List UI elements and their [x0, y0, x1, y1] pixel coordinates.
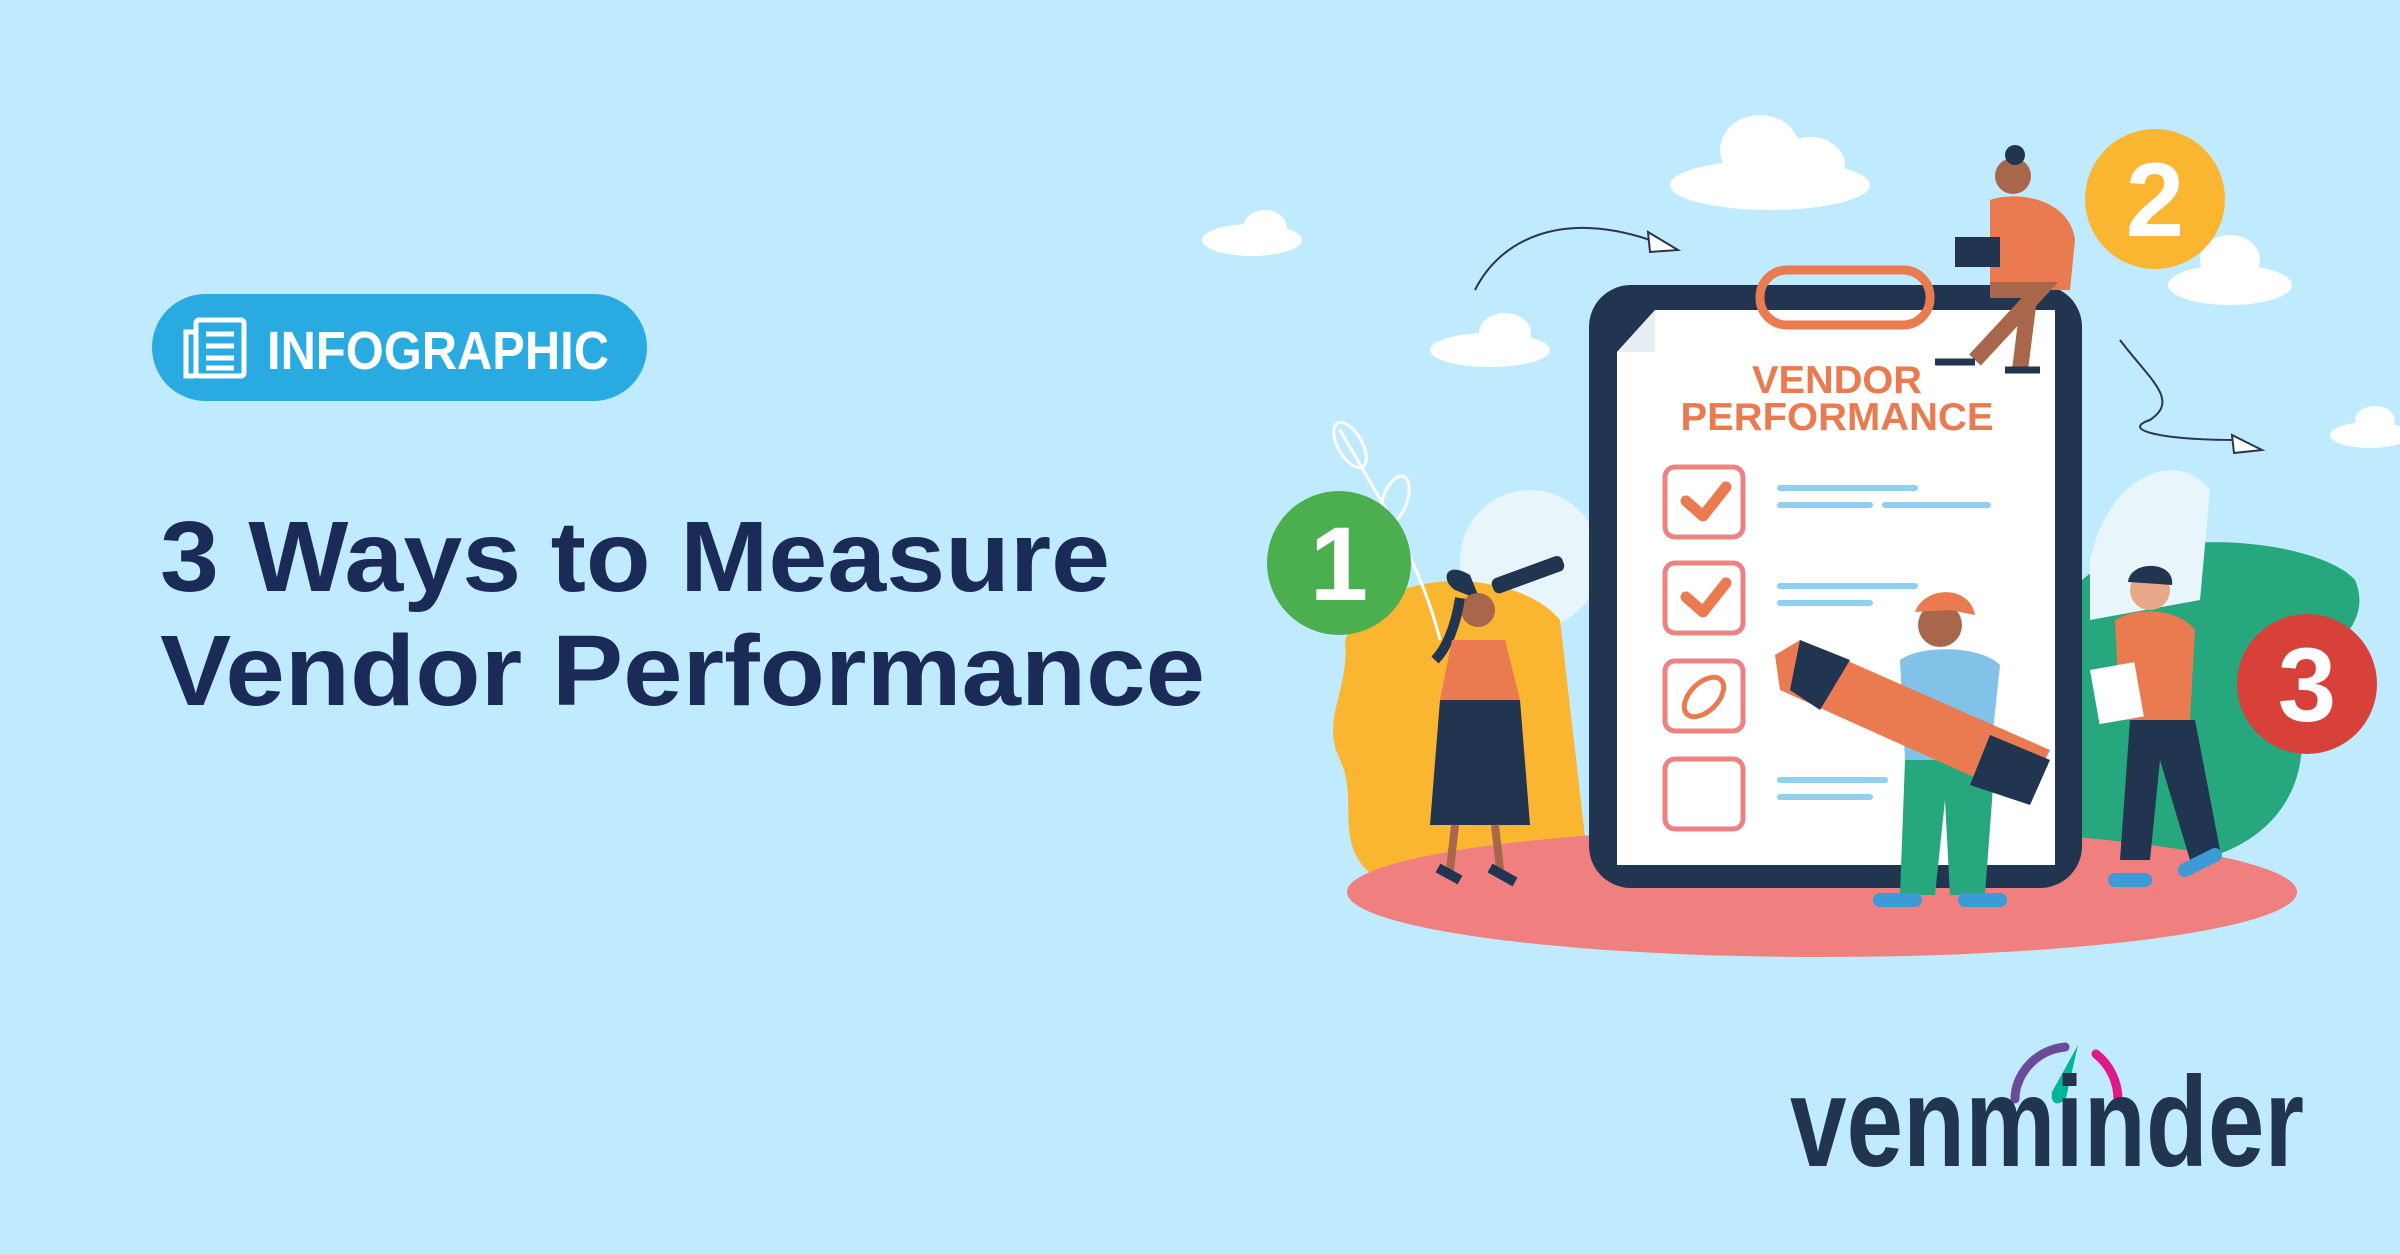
title: Vendor Performance [160, 615, 1205, 727]
clipboard heading [1680, 359, 1994, 439]
number 1 badge [1267, 491, 1411, 635]
ground ellipse [1347, 827, 2297, 957]
person: sitting with laptop [1935, 145, 2075, 370]
badge: infographic [152, 294, 647, 401]
icon: newspaper [186, 320, 244, 376]
number 2 badge [2085, 129, 2225, 269]
icon: gauge [2015, 1047, 2118, 1100]
number 3 badge [2237, 614, 2377, 754]
clouds [1202, 115, 2400, 448]
clip [1760, 270, 1930, 325]
person: woman with telescope [1430, 554, 1566, 882]
arrows: dashed flight paths [1475, 228, 2240, 440]
title: 3 Ways to Measure [160, 501, 1110, 613]
person: right with paper [2090, 566, 2220, 880]
title [160, 501, 1205, 727]
clipboard heading: VENDOR [1752, 359, 1922, 402]
number 2 badge: 2 [2126, 142, 2184, 259]
leaf decoration [1327, 417, 1440, 640]
number 3 badge: 3 [2278, 627, 2336, 744]
checklist [1665, 467, 1743, 829]
number 1 badge: 1 [1310, 506, 1368, 623]
badge: infographic: INFOGRAPHIC [267, 321, 609, 381]
person: man with marker [1775, 592, 2050, 900]
background blobs [1333, 470, 2359, 880]
clipboard heading: PERFORMANCE [1680, 396, 1994, 439]
clipboard [1589, 270, 2082, 888]
